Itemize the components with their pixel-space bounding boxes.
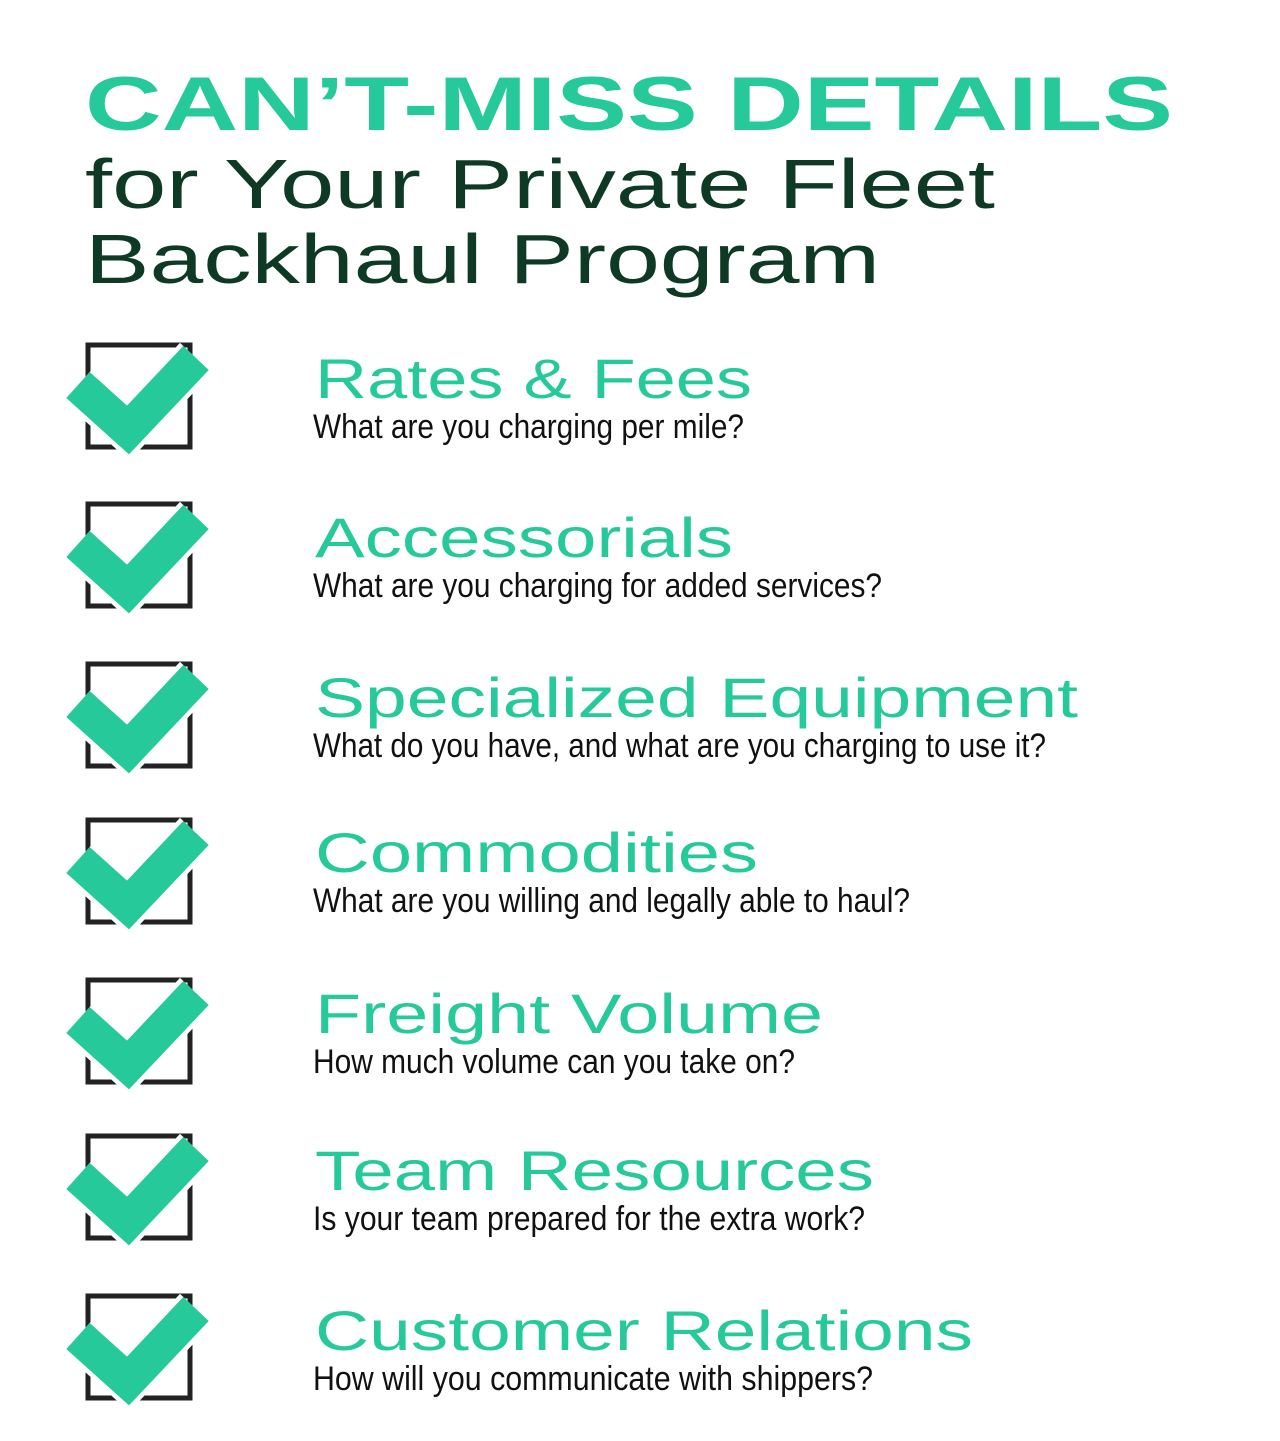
item: Specialized Equipment: Specialized Equipment: [315, 666, 1079, 729]
item: Team Resources: [78, 1136, 874, 1238]
icon: checkbox: [78, 664, 196, 766]
item: Commodities: [78, 820, 910, 922]
item: Commodities: What are you willing and legally able to haul?: [313, 882, 910, 920]
item: Commodities: Commodities: [315, 821, 758, 884]
icon: checkbox: [78, 820, 196, 922]
item: Freight Volume: How much volume can you take on?: [313, 1043, 795, 1081]
title: for Your Private Fleet: [85, 145, 995, 223]
item: Accessorials: [78, 504, 882, 606]
title: [85, 62, 1173, 298]
item: Freight Volume: Freight Volume: [315, 982, 823, 1045]
item: Specialized Equipment: What do you have, and what are you charging to use it?: [313, 727, 1046, 765]
icon: checkbox: [78, 980, 196, 1082]
title: CAN’T-MISS DETAILS: [85, 62, 1173, 147]
item: Accessorials: What are you charging for added services?: [313, 567, 882, 605]
item: Team Resources: Team Resources: [315, 1139, 874, 1202]
item: Customer Relations: [78, 1296, 973, 1398]
icon: checkbox: [78, 504, 196, 606]
item: Customer Relations: Customer Relations: [315, 1299, 973, 1362]
icon: checkbox: [78, 345, 196, 447]
title: Backhaul Program: [85, 220, 880, 298]
item: Accessorials: Accessorials: [315, 506, 733, 569]
icon: checkbox: [78, 1296, 196, 1398]
item: Rates & Fees: Rates & Fees: [315, 347, 752, 410]
item: Specialized Equipment: [78, 664, 1079, 766]
icon: checkbox: [78, 1136, 196, 1238]
item: Freight Volume: [78, 980, 823, 1082]
item: Rates & Fees: What are you charging per mile?: [313, 408, 744, 446]
item: Customer Relations: How will you communicate with shippers?: [313, 1360, 873, 1398]
item: Rates & Fees: [78, 345, 752, 447]
item: Team Resources: Is your team prepared for the extra work?: [313, 1200, 865, 1238]
